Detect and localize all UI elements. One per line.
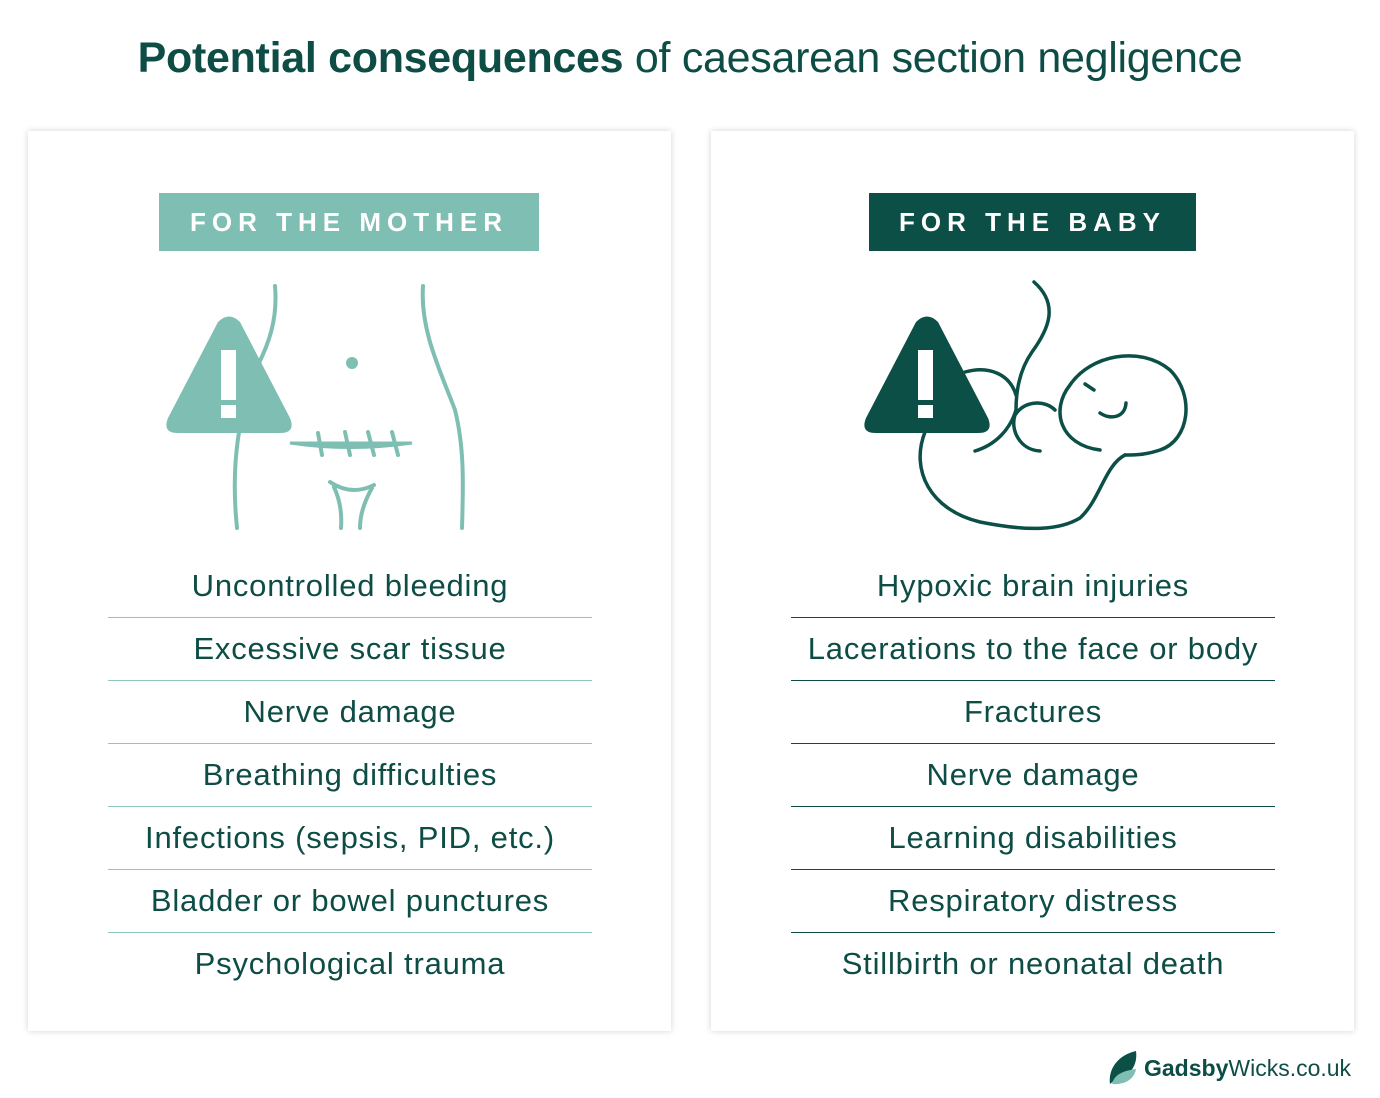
- list: baby consequences: Lacerations to the face or body: [808, 631, 1258, 666]
- icon: baby with warning: [864, 280, 1188, 530]
- list: baby consequences: Learning disabilities: [888, 820, 1178, 855]
- list: baby consequences: Nerve damage: [927, 757, 1139, 792]
- heading: for the baby: [869, 193, 1196, 251]
- heading: for the mother: [159, 193, 539, 251]
- list: baby consequences: Fractures: [964, 694, 1102, 729]
- list: mother consequences: [108, 568, 592, 981]
- list: baby consequences: Respiratory distress: [888, 883, 1178, 918]
- panel: baby: [711, 131, 1354, 1031]
- heading: for the baby: FOR THE BABY: [899, 207, 1166, 237]
- list: mother consequences: Nerve damage: [244, 694, 456, 729]
- list: baby consequences: Hypoxic brain injuries: [877, 568, 1189, 603]
- list: mother consequences: Bladder or bowel punctures: [151, 883, 549, 918]
- title: Potential consequences of caesarean section negligence: [138, 34, 1242, 82]
- list: mother consequences: Breathing difficulties: [203, 757, 497, 792]
- heading: for the mother: FOR THE MOTHER: [190, 207, 508, 237]
- list: baby consequences: Stillbirth or neonatal death: [842, 946, 1224, 981]
- logo: GadsbyWicks.co.uk: [1144, 1054, 1351, 1080]
- panel: mother: [28, 131, 671, 1031]
- list: mother consequences: Psychological trauma: [195, 946, 505, 981]
- list: mother consequences: Uncontrolled bleeding: [192, 568, 508, 603]
- list: mother consequences: Excessive scar tissue: [193, 631, 507, 666]
- icon: leaf: [1110, 1051, 1136, 1084]
- icon: mother abdomen with warning: [166, 284, 465, 530]
- list: mother consequences: Infections (sepsis, PID, etc.): [145, 820, 555, 855]
- list: baby consequences: [791, 568, 1275, 981]
- logo: [1110, 1051, 1351, 1084]
